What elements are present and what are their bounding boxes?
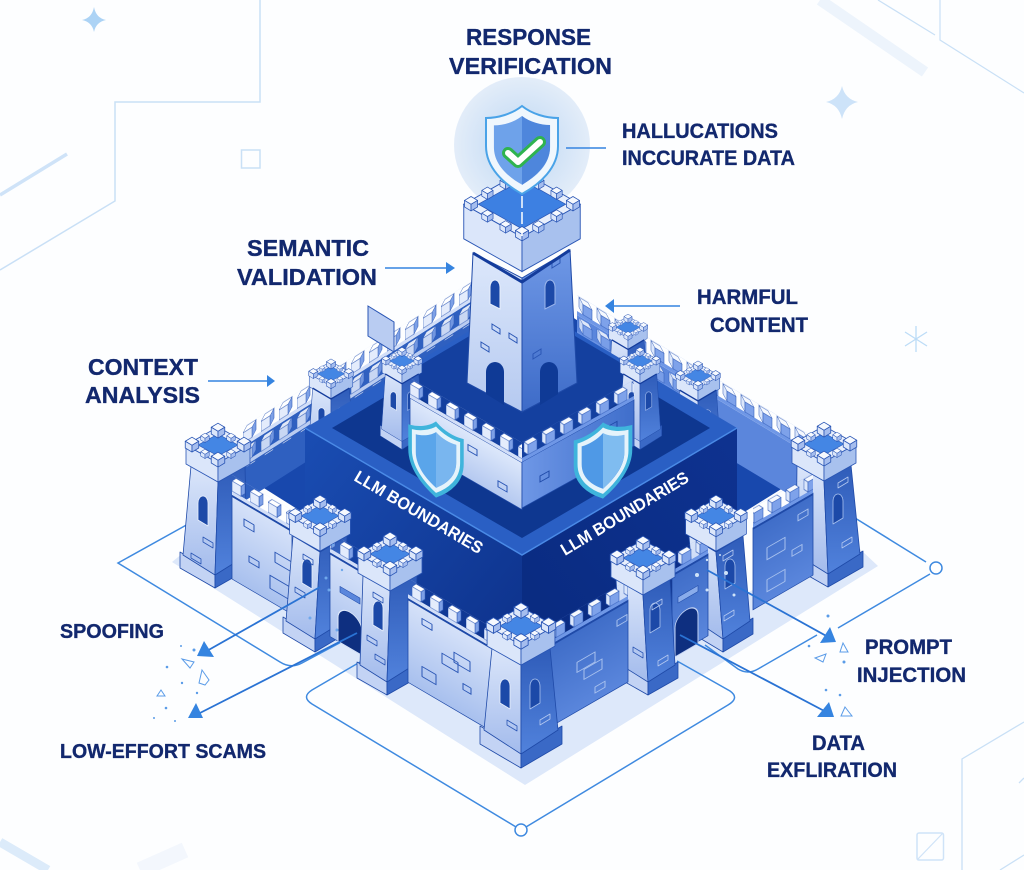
left gate section (330, 532, 372, 661)
arrow: semantic validation (385, 262, 455, 274)
label: prompt injection (857, 636, 966, 687)
right corner tower head (791, 422, 857, 481)
arrow: low-effort scams (188, 633, 357, 718)
label: low-effort scams: LOW-EFFORT SCAMS (60, 741, 266, 763)
panel: outer walls (180, 422, 863, 768)
icon: verified shield (486, 106, 558, 194)
label: semantic validation: SEMANTIC (247, 235, 369, 261)
back left turret (307, 359, 355, 471)
label: hallucations inccurate data (622, 120, 795, 170)
block left face (305, 428, 522, 705)
breach debris right (695, 554, 736, 596)
back right turret (674, 361, 722, 473)
label: prompt injection: INJECTION (857, 664, 966, 687)
far left gate tower body (283, 536, 347, 652)
tower windows (490, 280, 500, 309)
tower doors (486, 362, 504, 405)
left gate door (338, 605, 362, 655)
far right gate tower body (689, 536, 753, 652)
arrow: data exfiltration (680, 635, 834, 717)
right wall segment outer (753, 473, 813, 610)
label: harmful content (697, 286, 808, 337)
right gate door (675, 603, 698, 657)
label: data exfliration: EXFLIRATION (767, 759, 897, 782)
keep right turret (618, 347, 662, 450)
broken back tower (368, 306, 394, 352)
keep roof (395, 305, 650, 470)
right wall segment inner (550, 580, 628, 727)
ground shadow (172, 535, 878, 785)
left corner tower body (180, 466, 250, 588)
breach debris left (308, 544, 343, 632)
keep right wall (522, 380, 634, 508)
arrow: context analysis (208, 375, 275, 387)
label: hallucations inccurate data: HALLUCATIONS (622, 120, 778, 143)
gate tower right head (610, 536, 676, 595)
keep left turret (380, 347, 424, 450)
back left wall (243, 277, 478, 502)
upper right turret (607, 314, 649, 413)
tower head (464, 171, 580, 272)
arrow: spoofing (197, 587, 320, 657)
panel: central LLM boundaries block (305, 300, 737, 705)
right corner tower body (793, 465, 863, 587)
heading: response verification: RESPONSE (466, 24, 591, 50)
response verification halo (454, 77, 590, 213)
label: harmful content: HARMFUL (697, 286, 798, 309)
label: hallucations inccurate data: INCCURATE DATA (622, 147, 795, 170)
arrow: harmful content (605, 299, 680, 313)
ground circuit lines (118, 518, 942, 836)
tower left face (467, 253, 522, 412)
heading: response verification: VERIFICATION (449, 53, 612, 79)
icon: right wall shield (576, 418, 630, 504)
label: context analysis: ANALYSIS (85, 382, 200, 408)
main tower (464, 171, 580, 412)
left corner tower head (185, 423, 251, 482)
courtyard floor (235, 285, 812, 650)
label: LLM boundaries right: LLM BOUNDARIES (557, 468, 692, 559)
connector: hallucations (566, 147, 606, 149)
label: data exfliration: DATA (812, 732, 865, 755)
debris left (153, 645, 209, 722)
front corner tower body (480, 648, 562, 768)
left wall segment outer (232, 475, 293, 615)
tower bricks (481, 258, 560, 359)
label: semantic validation (237, 235, 377, 290)
label: context analysis: CONTEXT (88, 354, 198, 380)
gate tower left body (357, 575, 417, 695)
debris right (808, 614, 852, 716)
block top rim (305, 300, 737, 555)
label: semantic validation: VALIDATION (237, 264, 377, 290)
left wall segment inner (408, 578, 492, 732)
back right wall (577, 295, 812, 508)
far left gate tower head (289, 495, 351, 551)
icon: check mark (508, 142, 540, 162)
label: LLM boundaries left: LLM BOUNDARIES (351, 467, 486, 558)
label: context analysis (85, 354, 200, 408)
panel: keep (380, 305, 662, 510)
block recess (332, 316, 710, 538)
tower right face (522, 250, 577, 412)
block right face (522, 428, 737, 705)
far right gate tower head (685, 495, 747, 551)
label: spoofing: SPOOFING (60, 621, 164, 643)
gate tower left head (357, 532, 423, 591)
gate tower right body (616, 579, 678, 695)
front corner tower head (486, 603, 556, 665)
beam of light (521, 196, 523, 236)
label: harmful content: CONTENT (710, 314, 808, 337)
keep left wall (410, 378, 522, 510)
arrow: prompt injection (707, 570, 836, 643)
label: data exfliration (767, 732, 897, 782)
label: prompt injection: PROMPT (865, 636, 952, 659)
icon: left wall shield (410, 417, 462, 502)
right gate section (672, 534, 708, 659)
heading: response verification (449, 24, 612, 79)
